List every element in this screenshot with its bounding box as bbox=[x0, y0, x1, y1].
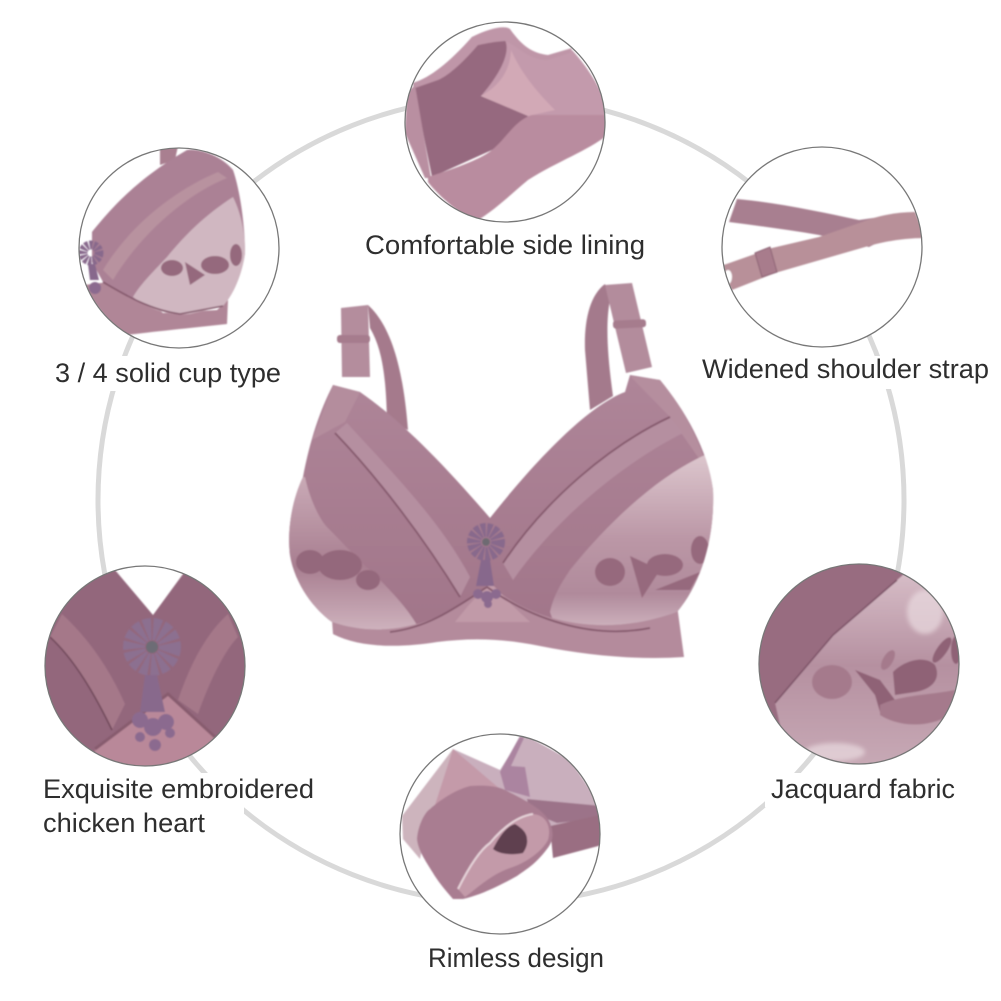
left pleat bbox=[50, 614, 125, 730]
rolled fold bbox=[417, 786, 553, 899]
cups silhouette bbox=[289, 375, 713, 630]
embroidered pendant bbox=[473, 530, 501, 608]
right jacquard panel bbox=[550, 455, 714, 626]
jacquard panel bbox=[133, 197, 245, 314]
lining left mauve bbox=[413, 37, 528, 177]
lower elastic band bbox=[428, 115, 610, 222]
jacquard panel bbox=[402, 750, 453, 859]
side wings bbox=[312, 385, 360, 440]
label: exquisite embroidered chicken heart bbox=[43, 774, 314, 838]
circle: embroidered chicken heart bbox=[45, 560, 245, 770]
circle: widened shoulder strap bbox=[718, 147, 925, 347]
front of strap bbox=[718, 212, 925, 290]
label: rimless design: Rimless design bbox=[428, 943, 604, 973]
upper cup bbox=[91, 149, 246, 291]
right pleat bbox=[178, 614, 238, 714]
band bbox=[332, 570, 684, 658]
label: widened shoulder strap: Widened shoulder strap bbox=[702, 354, 989, 384]
circle: 3/4 solid cup bbox=[79, 146, 279, 348]
lining right pink bbox=[481, 40, 604, 118]
side stripe bbox=[405, 85, 431, 178]
right strap bbox=[585, 283, 652, 410]
circle: comfortable side lining bbox=[405, 22, 610, 222]
circle: jacquard fabric bbox=[759, 560, 965, 770]
flower bbox=[83, 245, 99, 261]
middle band bbox=[527, 799, 602, 823]
product photo: bra bbox=[280, 283, 720, 658]
label: 3/4 solid cup type: 3 / 4 solid cup type bbox=[55, 358, 281, 388]
top trim bbox=[413, 27, 572, 88]
right pleat band bbox=[503, 417, 683, 580]
label: comfortable side lining: Comfortable side lining bbox=[365, 230, 645, 260]
pleat band bbox=[103, 172, 227, 280]
left jacquard panel bbox=[290, 476, 416, 630]
back of strap bbox=[728, 198, 874, 248]
right strap band bbox=[550, 817, 600, 859]
lower band bbox=[84, 280, 228, 335]
label: exquisite embroidered chicken heart: Exquisite embroidered bbox=[43, 774, 314, 804]
pink gore bbox=[95, 694, 215, 770]
gore bbox=[455, 582, 530, 622]
decorative ring bbox=[98, 97, 904, 903]
label: exquisite embroidered chicken heart: chicken heart bbox=[43, 808, 205, 838]
strap slider bbox=[755, 247, 777, 277]
label: jacquard fabric: Jacquard fabric bbox=[771, 774, 955, 804]
left strap bbox=[337, 305, 408, 430]
inner fold bbox=[458, 814, 549, 897]
jacquard flowers bbox=[855, 635, 961, 712]
circle: rimless design bbox=[400, 734, 605, 934]
left pleat band bbox=[335, 423, 470, 597]
pale back of cup bbox=[454, 737, 596, 826]
flower bbox=[134, 629, 170, 665]
pleat and underwire lines bbox=[335, 417, 670, 632]
